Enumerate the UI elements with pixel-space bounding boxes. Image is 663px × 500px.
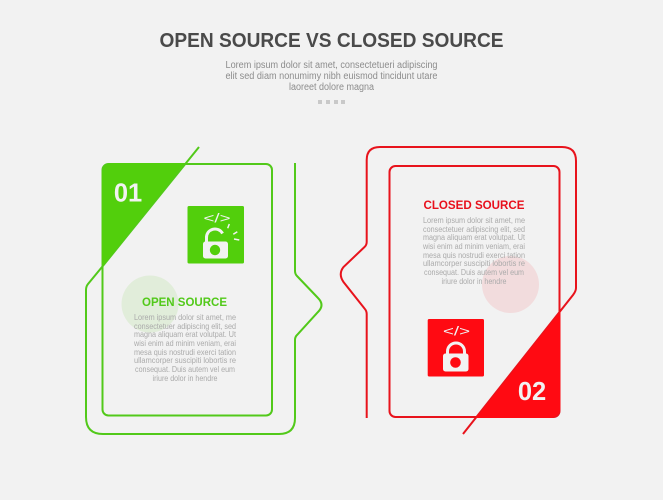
inner card outline (390, 166, 560, 417)
outer outline (86, 147, 322, 434)
subtitle: Lorem ipsum dolor sit amet, consectetueri adipiscing (226, 60, 438, 71)
decorative circle red (482, 256, 539, 313)
outer outline (341, 147, 576, 434)
number 01: 01 (114, 180, 142, 208)
body text: iriure dolor in hendre (442, 276, 507, 286)
body text: Lorem ipsum dolor sit amet, me (134, 312, 236, 322)
body text: mesa quis nostrudi exerci tation (134, 347, 236, 357)
subtitle (226, 60, 438, 93)
body text: Lorem ipsum dolor sit amet, me (423, 215, 525, 225)
subtitle: laoreet dolore magna (289, 82, 375, 93)
panel: closed source (341, 147, 576, 434)
body text: wisi enim ad minim veniam, erai (133, 338, 236, 348)
number corner (102, 163, 185, 267)
body text: ullamcorper suscipiti lobortis re (423, 258, 525, 268)
body text: consequat. Duis autem vel eum (135, 364, 235, 374)
icon: open lock (188, 206, 244, 264)
decorative circle green (122, 276, 178, 332)
panel: open source (86, 147, 322, 434)
icon: closed lock (428, 319, 484, 376)
pagination dots (318, 100, 345, 104)
heading: open source: OPEN SOURCE (142, 295, 227, 309)
title: OPEN SOURCE VS CLOSED SOURCE (160, 29, 504, 52)
body text: ullamcorper suscipiti lobortis re (134, 355, 236, 365)
body text: consectetuer adipiscing elit, sed (423, 224, 525, 234)
subtitle: elit sed diam nonumimy nibh euismod tincidunt utare (226, 71, 438, 82)
body text (133, 312, 237, 383)
body text: mesa quis nostrudi exerci tation (423, 250, 525, 260)
body text: iriure dolor in hendre (152, 373, 218, 383)
heading: closed source: CLOSED SOURCE (424, 198, 524, 212)
icon: closed lock: </> (443, 324, 470, 338)
body text: magna aliquam erat volutpat. Ut (423, 232, 526, 242)
body text: magna aliquam erat volutpat. Ut (134, 329, 237, 339)
number corner (476, 311, 560, 418)
number 02: 02 (518, 378, 546, 406)
body text: consectetuer adipiscing elit, sed (134, 321, 236, 331)
inner card outline (102, 164, 272, 416)
body text (422, 215, 526, 286)
icon: open lock: </> (204, 212, 230, 226)
body text: wisi enim ad minim veniam, erai (422, 241, 525, 251)
body text: consequat. Duis autem vel eum (424, 267, 524, 277)
